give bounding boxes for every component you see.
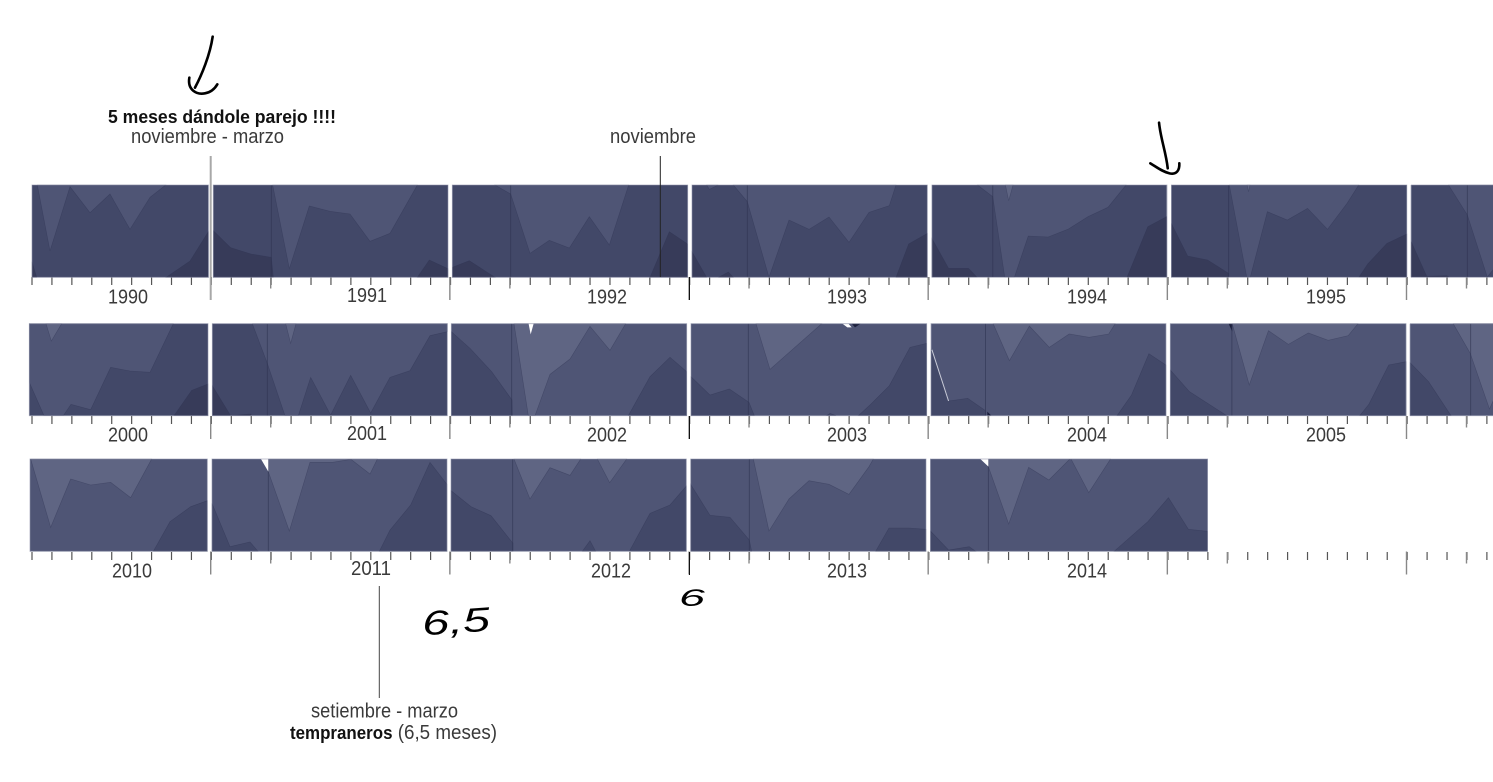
year labels row 3: 2014 xyxy=(1067,560,1107,582)
panel: 2013 xyxy=(691,459,926,551)
panel: 1995 xyxy=(1171,185,1407,277)
year labels row 3: 2010 xyxy=(112,560,152,582)
label: setiembre - marzo: setiembre - marzo xyxy=(311,700,458,722)
label: tempraneros: tempraneros (6,5 meses) xyxy=(290,722,497,744)
year labels row 2: 2005 xyxy=(1306,424,1346,446)
handwritten note: 6,5: 6,5 xyxy=(421,601,491,643)
year labels row 1 xyxy=(108,285,1346,308)
panel: 1991 xyxy=(213,185,448,277)
panel: 2012 xyxy=(451,459,686,551)
panel: 2005 xyxy=(1170,324,1406,416)
year labels row 1: 1991 xyxy=(347,285,387,307)
year labels row 3: 2013 xyxy=(827,560,867,582)
year labels row 1: 1990 xyxy=(108,286,148,308)
label: noviembre - marzo: noviembre - marzo xyxy=(131,126,284,148)
year labels row 1: 1993 xyxy=(827,286,867,308)
panel: 1990 xyxy=(32,185,208,277)
axis ticks row 2 xyxy=(31,416,1493,439)
year labels row 2: 2002 xyxy=(587,424,627,446)
year labels row 3: 2011 xyxy=(351,558,391,580)
axis ticks row 3 xyxy=(31,552,1493,575)
axis ticks row 1 xyxy=(31,277,1493,300)
year labels row 2: 2004 xyxy=(1067,424,1107,446)
icon: hand-drawn arrow to 1990/1991 xyxy=(189,37,217,94)
heading: 5 meses: 5 meses dándole parejo !!!! xyxy=(108,107,336,127)
panel: 1992 xyxy=(452,185,688,277)
year labels row 3: 2012 xyxy=(591,560,631,582)
panel: 2003 xyxy=(691,322,927,416)
panel: 2002 xyxy=(451,322,687,416)
year labels row 2: 2003 xyxy=(827,424,867,446)
panel: 2004 xyxy=(931,324,1166,416)
panel: 1993 xyxy=(692,185,927,277)
leader line: setiembre - marzo xyxy=(378,586,380,698)
panel: 2011 xyxy=(212,457,447,551)
panel: 2000 xyxy=(29,324,208,416)
year labels row 1: 1992 xyxy=(587,286,627,308)
year labels row 2: 2000 xyxy=(108,424,148,446)
panel: 1996 partial xyxy=(1411,185,1493,277)
year labels row 1: 1994 xyxy=(1067,286,1107,308)
year labels row 3 xyxy=(112,558,1107,582)
panel edge highlights xyxy=(29,185,1493,551)
year labels row 2: 2001 xyxy=(347,423,387,445)
icon: hand-drawn arrow to 1994/1995 xyxy=(1150,123,1179,174)
panel: 2006 partial xyxy=(1410,324,1493,416)
year labels row 2 xyxy=(108,423,1346,446)
year labels row 1: 1995 xyxy=(1306,286,1346,308)
panel: 2010 xyxy=(30,459,207,551)
leader line: noviembre xyxy=(659,156,661,277)
label: noviembre: noviembre xyxy=(610,126,696,148)
panel: 2001 xyxy=(212,324,447,416)
handwritten note: 6: 6 xyxy=(679,585,706,612)
panel: 1994 xyxy=(932,185,1167,277)
panel: 2014 xyxy=(930,457,1208,551)
leader line: noviembre - marzo xyxy=(210,156,212,300)
